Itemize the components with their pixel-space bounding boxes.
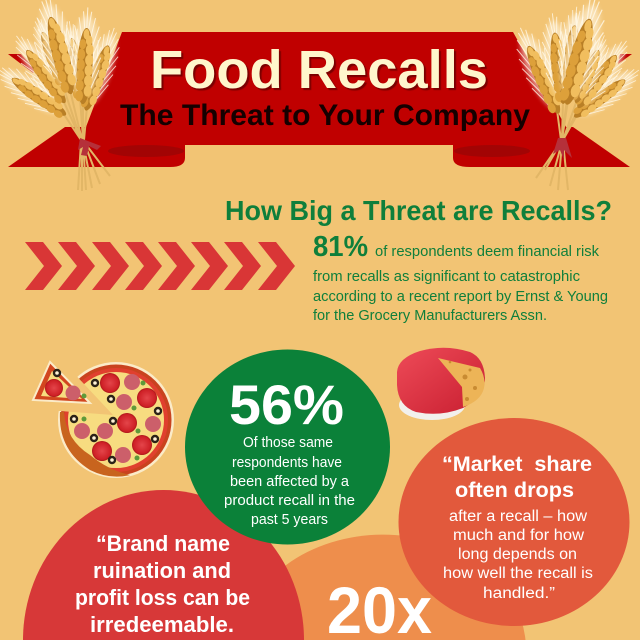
- circle: market share quote: how well the recall is: [443, 565, 593, 582]
- text block: 81 percent statistic: according to a recent report by Ernst & Young: [313, 288, 608, 305]
- circle: market share quote: much and for how: [453, 527, 585, 544]
- wheat bundle right: [507, 0, 640, 190]
- text block: 81 percent statistic: from recalls as significant to catastrophic: [313, 268, 580, 285]
- circle: market share quote: [398, 418, 630, 626]
- subtitle: The Threat to Your Company: [120, 99, 530, 132]
- banner ribbon: [8, 32, 632, 167]
- circle: market share quote: “Market share: [442, 453, 592, 476]
- circle: brand name quote: ruination and: [93, 558, 231, 583]
- circle: 56 percent statistic: past 5 years: [251, 512, 328, 528]
- circle: brand name quote: [23, 490, 304, 640]
- circle: brand name quote: irredeemable.: [90, 612, 234, 637]
- text block: 81 percent statistic: of respondents deem financial risk: [375, 243, 599, 260]
- chevron arrow row: [25, 242, 295, 290]
- text block: 81 percent statistic: for the Grocery Manufacturers Assn.: [313, 307, 547, 324]
- circle: 56 percent statistic: been affected by a: [230, 474, 350, 490]
- title: Food Recalls: [150, 40, 488, 100]
- circle: 56 percent statistic: [185, 350, 390, 544]
- circle: bottom orange (20x): [240, 535, 526, 640]
- circle: 56 percent statistic: product recall in the: [224, 493, 355, 509]
- circle: market share quote: long depends on: [458, 546, 577, 563]
- circle: 56 percent statistic: Of those same: [243, 435, 333, 451]
- circle: 56 percent statistic: 56%: [229, 373, 344, 436]
- icon: pizza: [33, 362, 174, 478]
- wheat bundle left: [0, 0, 127, 191]
- text block: 81 percent statistic: 81%: [313, 231, 368, 263]
- heading: how big a threat: How Big a Threat are Recalls?: [225, 195, 612, 226]
- circle: market share quote: after a recall – how: [449, 508, 588, 525]
- circle: market share quote: often drops: [455, 479, 574, 502]
- circle: 56 percent statistic: respondents have: [232, 455, 342, 471]
- circle: market share quote: handled.”: [483, 585, 555, 602]
- circle: brand name quote: “Brand name: [96, 531, 230, 556]
- icon: cheese wheel: [397, 348, 485, 420]
- circle: brand name quote: profit loss can be: [75, 585, 250, 610]
- text block: 81 percent statistic: [313, 231, 608, 324]
